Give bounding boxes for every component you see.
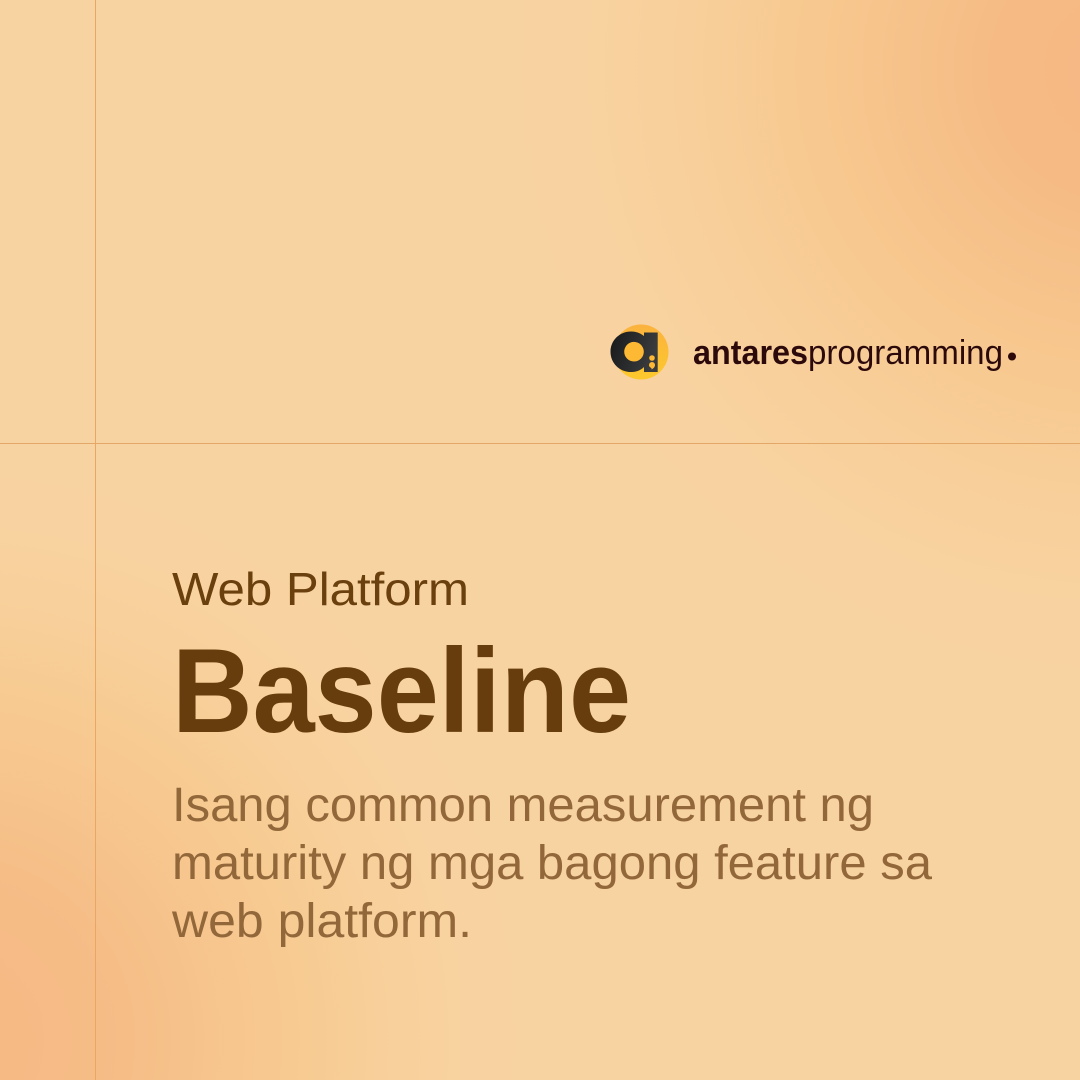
logo wordmark: antares	[693, 334, 808, 372]
description: Isang common measurement ng	[172, 779, 874, 832]
subtitle: Web Platform	[172, 563, 469, 615]
title: Baseline	[172, 624, 631, 758]
description: maturity ng mga bagong feature sa	[172, 837, 932, 890]
logo wordmark: programming	[808, 334, 1003, 372]
description: web platform.	[171, 895, 472, 948]
icon: antares logo	[610, 324, 668, 380]
logo wordmark	[693, 334, 1016, 372]
description	[171, 779, 932, 948]
